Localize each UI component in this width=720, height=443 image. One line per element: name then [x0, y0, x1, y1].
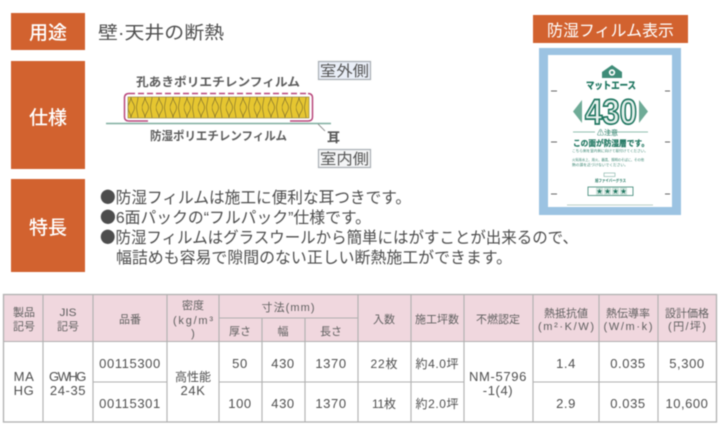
star rating strip	[588, 187, 633, 196]
label: 用途	[11, 13, 85, 50]
ear label: 耳	[327, 130, 340, 145]
star rating strip: ★	[596, 188, 603, 196]
label: 仕様	[11, 61, 85, 169]
table header text	[13, 298, 709, 340]
table body text: MA	[14, 369, 34, 384]
table header text: 製品	[13, 305, 35, 319]
specification table	[4, 294, 717, 422]
vapor film label: 防湿ポリエチレンフィルム	[150, 128, 287, 143]
table header text: (m²·K/W)	[538, 321, 594, 333]
perforated film outline	[124, 94, 312, 121]
icon: right arrow	[639, 100, 648, 123]
table body text: -1(4)	[483, 383, 513, 398]
table body text: 11枚	[372, 396, 396, 411]
table body text: 10,600	[666, 396, 708, 411]
table body text: 5,300	[669, 356, 705, 371]
table body text: 24-35	[50, 383, 86, 398]
table header text: 密度	[182, 298, 204, 312]
caution line: ⚠注意	[597, 128, 618, 137]
maker name	[595, 173, 626, 183]
table body text: NM-5796	[469, 369, 527, 384]
caution notes: こちら側を室内側に向けて取付けてください。	[572, 148, 648, 153]
table body text: 430	[271, 356, 295, 371]
table body text: 0.035	[610, 396, 646, 411]
features list: ●防湿フィルムはグラスウールから簡単にはがすことが出来るので、	[100, 224, 578, 248]
glass wool core	[128, 97, 309, 118]
star rating strip: ★	[604, 188, 611, 196]
star rating strip: ★	[612, 188, 619, 196]
table body text: 24K	[181, 383, 205, 398]
table header text: 幅	[278, 325, 288, 338]
table header text: (円/坪)	[668, 320, 706, 333]
table body text: 50	[232, 356, 248, 371]
label: 仕様: 仕様	[29, 107, 67, 129]
heading: film display: 防湿フィルム表示	[547, 22, 674, 40]
features list: ●防湿フィルムは施工に便利な耳つきです。	[100, 184, 411, 208]
table body text: 約2.0坪	[416, 396, 458, 411]
star rating strip: ★	[620, 188, 627, 196]
table header text: 長さ	[320, 325, 342, 338]
table header text: 設計価格	[665, 306, 709, 320]
table body text: 100	[228, 396, 252, 411]
product package image	[539, 48, 681, 215]
table body text: HG	[14, 383, 34, 398]
table header text: JIS	[60, 307, 76, 319]
table header background	[4, 294, 717, 341]
label: 特長	[11, 179, 85, 272]
caution heading: この面が防湿層です。	[573, 138, 649, 148]
label: 特長: 特長	[29, 217, 67, 239]
table header text: 熱抵抗値	[544, 306, 588, 320]
leader line	[318, 124, 325, 131]
features list: ●6面パックの“フルパック”仕様です。	[100, 204, 371, 228]
heading: film display	[533, 15, 688, 43]
icon: left arrow	[573, 100, 582, 123]
features list: 幅詰めも容易で隙間のない正しい断熱施工ができます。	[116, 249, 512, 267]
diagram: insulation cross-section	[106, 62, 370, 168]
table body text: 430	[271, 396, 295, 411]
table body text: 00115300	[99, 356, 161, 371]
table header text: 熱伝導率	[606, 306, 650, 320]
table header text: 厚さ	[229, 325, 251, 338]
table body text: 2.9	[556, 396, 576, 411]
table body text: 約4.0坪	[416, 356, 458, 371]
maker name: 旭ファイバーグラス	[595, 177, 626, 183]
perforated film label: 孔あきポリエチレンフィルム	[136, 75, 300, 89]
outside label: 室外側	[320, 63, 369, 80]
table body text: GWHG	[49, 369, 87, 384]
table header text: 記号	[13, 320, 35, 333]
features list	[100, 184, 578, 267]
table body text: 1370	[315, 396, 347, 411]
caution line	[573, 128, 648, 137]
usage text: 壁·天井の断熱	[98, 23, 224, 43]
table body text: 高性能	[175, 370, 211, 384]
table body text	[14, 356, 708, 411]
table header text: 施工坪数	[415, 313, 459, 326]
table grid	[4, 294, 716, 422]
caution notes	[572, 148, 648, 167]
label: 用途: 用途	[29, 22, 67, 44]
inside label: 室内側	[320, 151, 369, 168]
table header text: 記号	[57, 320, 79, 333]
number 430: 430	[585, 93, 637, 132]
caution notes: 熱の源を近づけないでください。	[572, 162, 628, 167]
table body text: 0.035	[610, 356, 646, 371]
table header text: 品番	[119, 313, 141, 326]
caution notes: 火気雨水上、用火、器具、照明のそばに、その他	[572, 157, 644, 162]
table body text: 1370	[315, 356, 347, 371]
table header text: (W/m·k)	[604, 321, 652, 333]
table body text: 22枚	[370, 356, 398, 371]
table body text: 1.4	[556, 356, 576, 371]
table header text: )	[191, 328, 195, 340]
table body text: 00115301	[99, 396, 161, 411]
table header text: 入数	[373, 313, 395, 326]
table header text: 寸法(mm)	[262, 300, 314, 314]
vapor barrier film	[106, 122, 331, 124]
table header text: (kg/m³	[173, 315, 213, 327]
side marks	[551, 91, 670, 194]
brand name: マットエース	[586, 80, 636, 92]
table header text: 不燃認定	[476, 312, 520, 326]
icon: house logo	[602, 65, 622, 78]
